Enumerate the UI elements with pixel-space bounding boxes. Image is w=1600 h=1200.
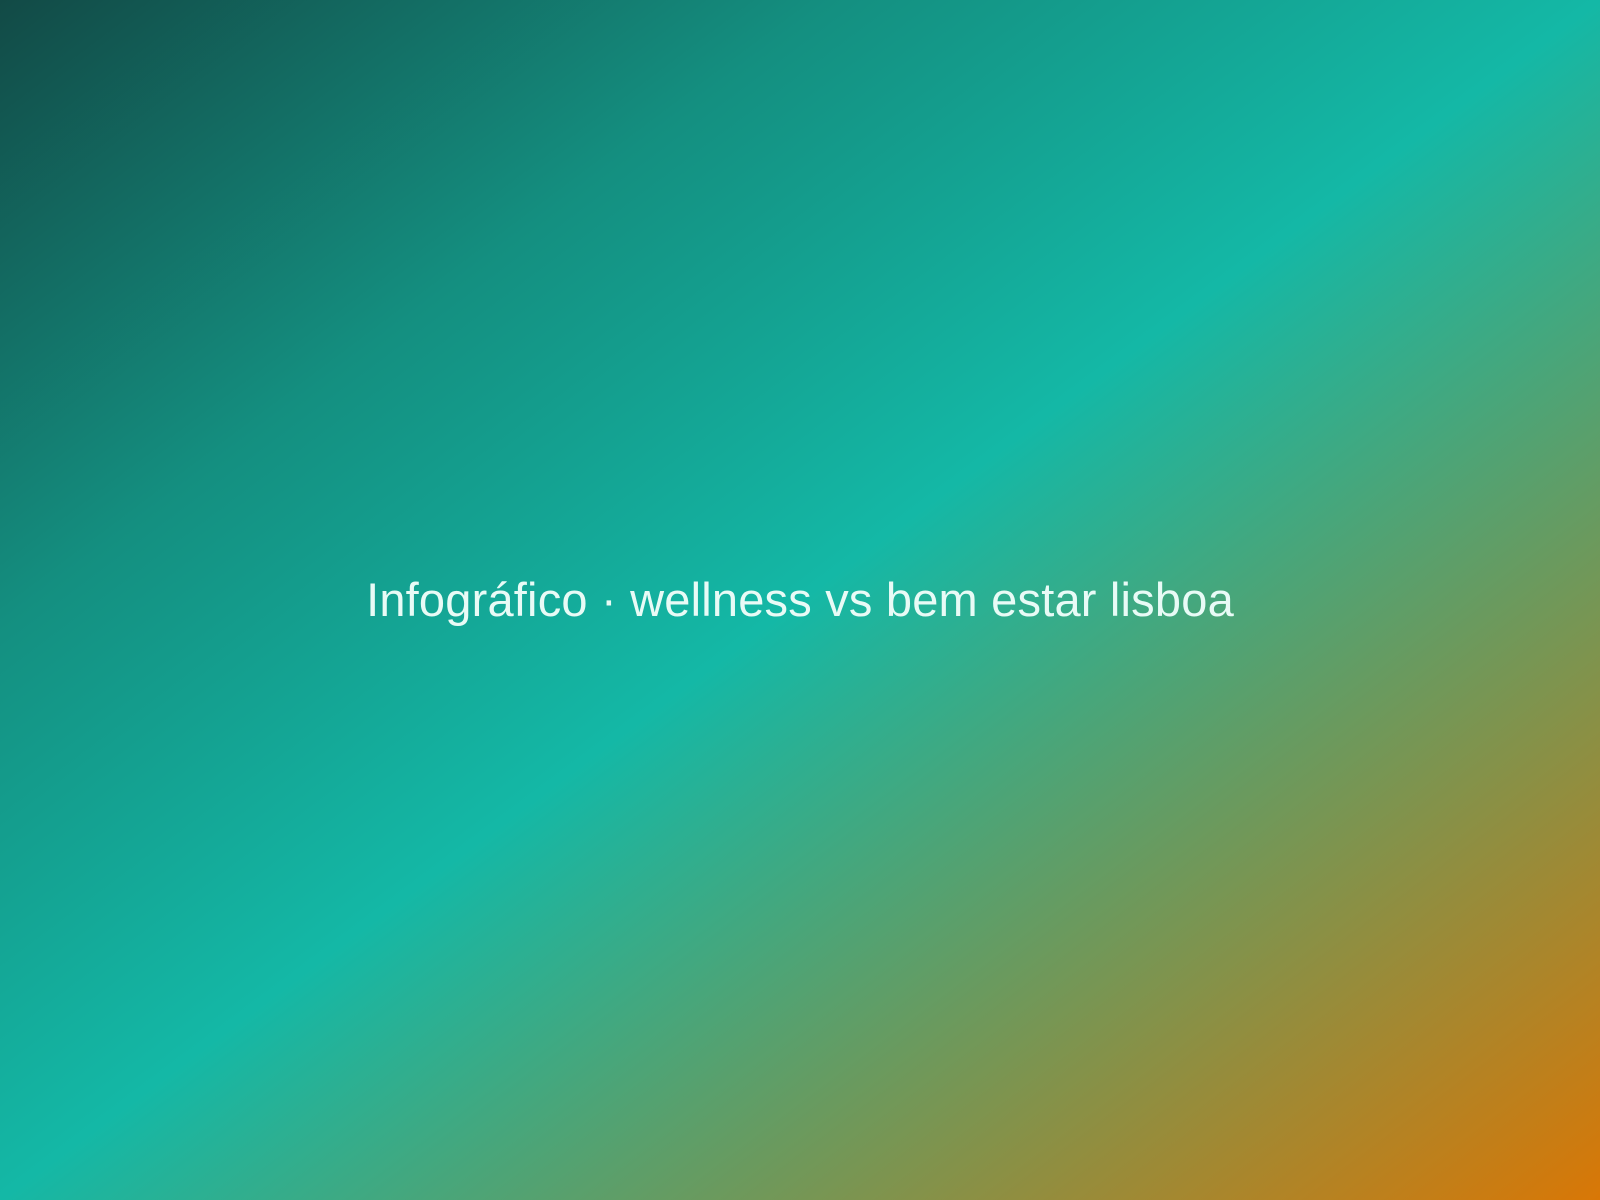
- title: Infográfico · wellness vs bem estar lisboa: [366, 573, 1234, 626]
